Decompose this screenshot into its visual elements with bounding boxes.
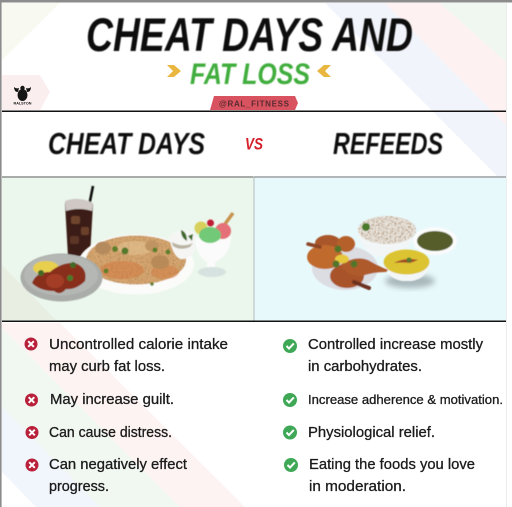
item: physiological relief: Physiological relief. xyxy=(308,424,435,441)
item: uncontrolled calorie intake xyxy=(24,336,228,375)
panel: refeeds food xyxy=(254,176,506,321)
list: refeeds benefits xyxy=(283,336,503,495)
header divider xyxy=(2,110,506,112)
heading: cheat days: CHEAT DAYS xyxy=(48,126,205,161)
subtitle: fat loss: FAT LOSS xyxy=(190,58,310,91)
icon: biryani plate xyxy=(78,234,194,294)
icon: red cross xyxy=(26,426,38,439)
item: eating the foods you love: in moderation. xyxy=(309,478,406,495)
title: CHEAT DAYS AND xyxy=(86,8,413,61)
background diagonal bands: header xyxy=(2,3,506,177)
item: eating the foods you love: Eating the foods you love xyxy=(309,456,475,473)
item: controlled increase: in carbohydrates. xyxy=(308,358,422,375)
item: may increase guilt: May increase guilt. xyxy=(50,391,174,408)
icon: rice bowl xyxy=(357,216,416,256)
icon: green check xyxy=(284,458,298,472)
item: can cause distress: Can cause distress. xyxy=(49,424,172,441)
item: uncontrolled calorie intake: Uncontrolled calorie intake xyxy=(49,336,228,353)
item: can negatively effect progress xyxy=(26,456,188,495)
heading: refeeds: REFEEDS xyxy=(333,126,443,161)
item: uncontrolled calorie intake: may curb fat loss. xyxy=(49,358,165,375)
lower divider xyxy=(2,320,506,322)
handle tag xyxy=(210,96,298,110)
item: controlled increase xyxy=(283,336,483,375)
icon: green check xyxy=(283,339,297,353)
icon: dal bowl xyxy=(383,250,435,288)
item: increase adherence: Increase adherence & motivation. xyxy=(308,392,503,407)
icon: green check xyxy=(283,426,297,440)
icon: green check xyxy=(283,393,297,407)
icon: iced cola glass xyxy=(65,186,93,257)
item: eating the foods you love xyxy=(284,456,475,495)
background diagonal bands: lists xyxy=(2,323,245,507)
icon: red cross xyxy=(26,458,38,472)
panel: cheat days food xyxy=(2,176,254,321)
logo tab xyxy=(2,75,50,110)
item: can negatively effect progress: progress. xyxy=(49,478,109,495)
icon: tandoori chicken plate xyxy=(307,235,388,290)
list: cheat days drawbacks xyxy=(24,336,228,495)
icon: raita bowl xyxy=(169,230,195,259)
icon: red cross xyxy=(25,394,38,406)
icon: red cross xyxy=(24,338,38,350)
handle tag: @RAL_FITNESS xyxy=(219,100,290,108)
heading: vs: VS xyxy=(245,134,264,154)
icon: bodybuilder logo: RALSTON xyxy=(14,102,32,106)
icon: ice cream sundae xyxy=(194,213,233,277)
icon: grey plate with chicken xyxy=(20,254,102,302)
left chevron xyxy=(167,65,181,77)
right chevron xyxy=(317,65,331,77)
item: can negatively effect progress: Can negatively effect xyxy=(49,456,188,473)
icon: vegetable bowl xyxy=(413,227,457,255)
item: controlled increase: Controlled increase mostly xyxy=(308,336,483,353)
